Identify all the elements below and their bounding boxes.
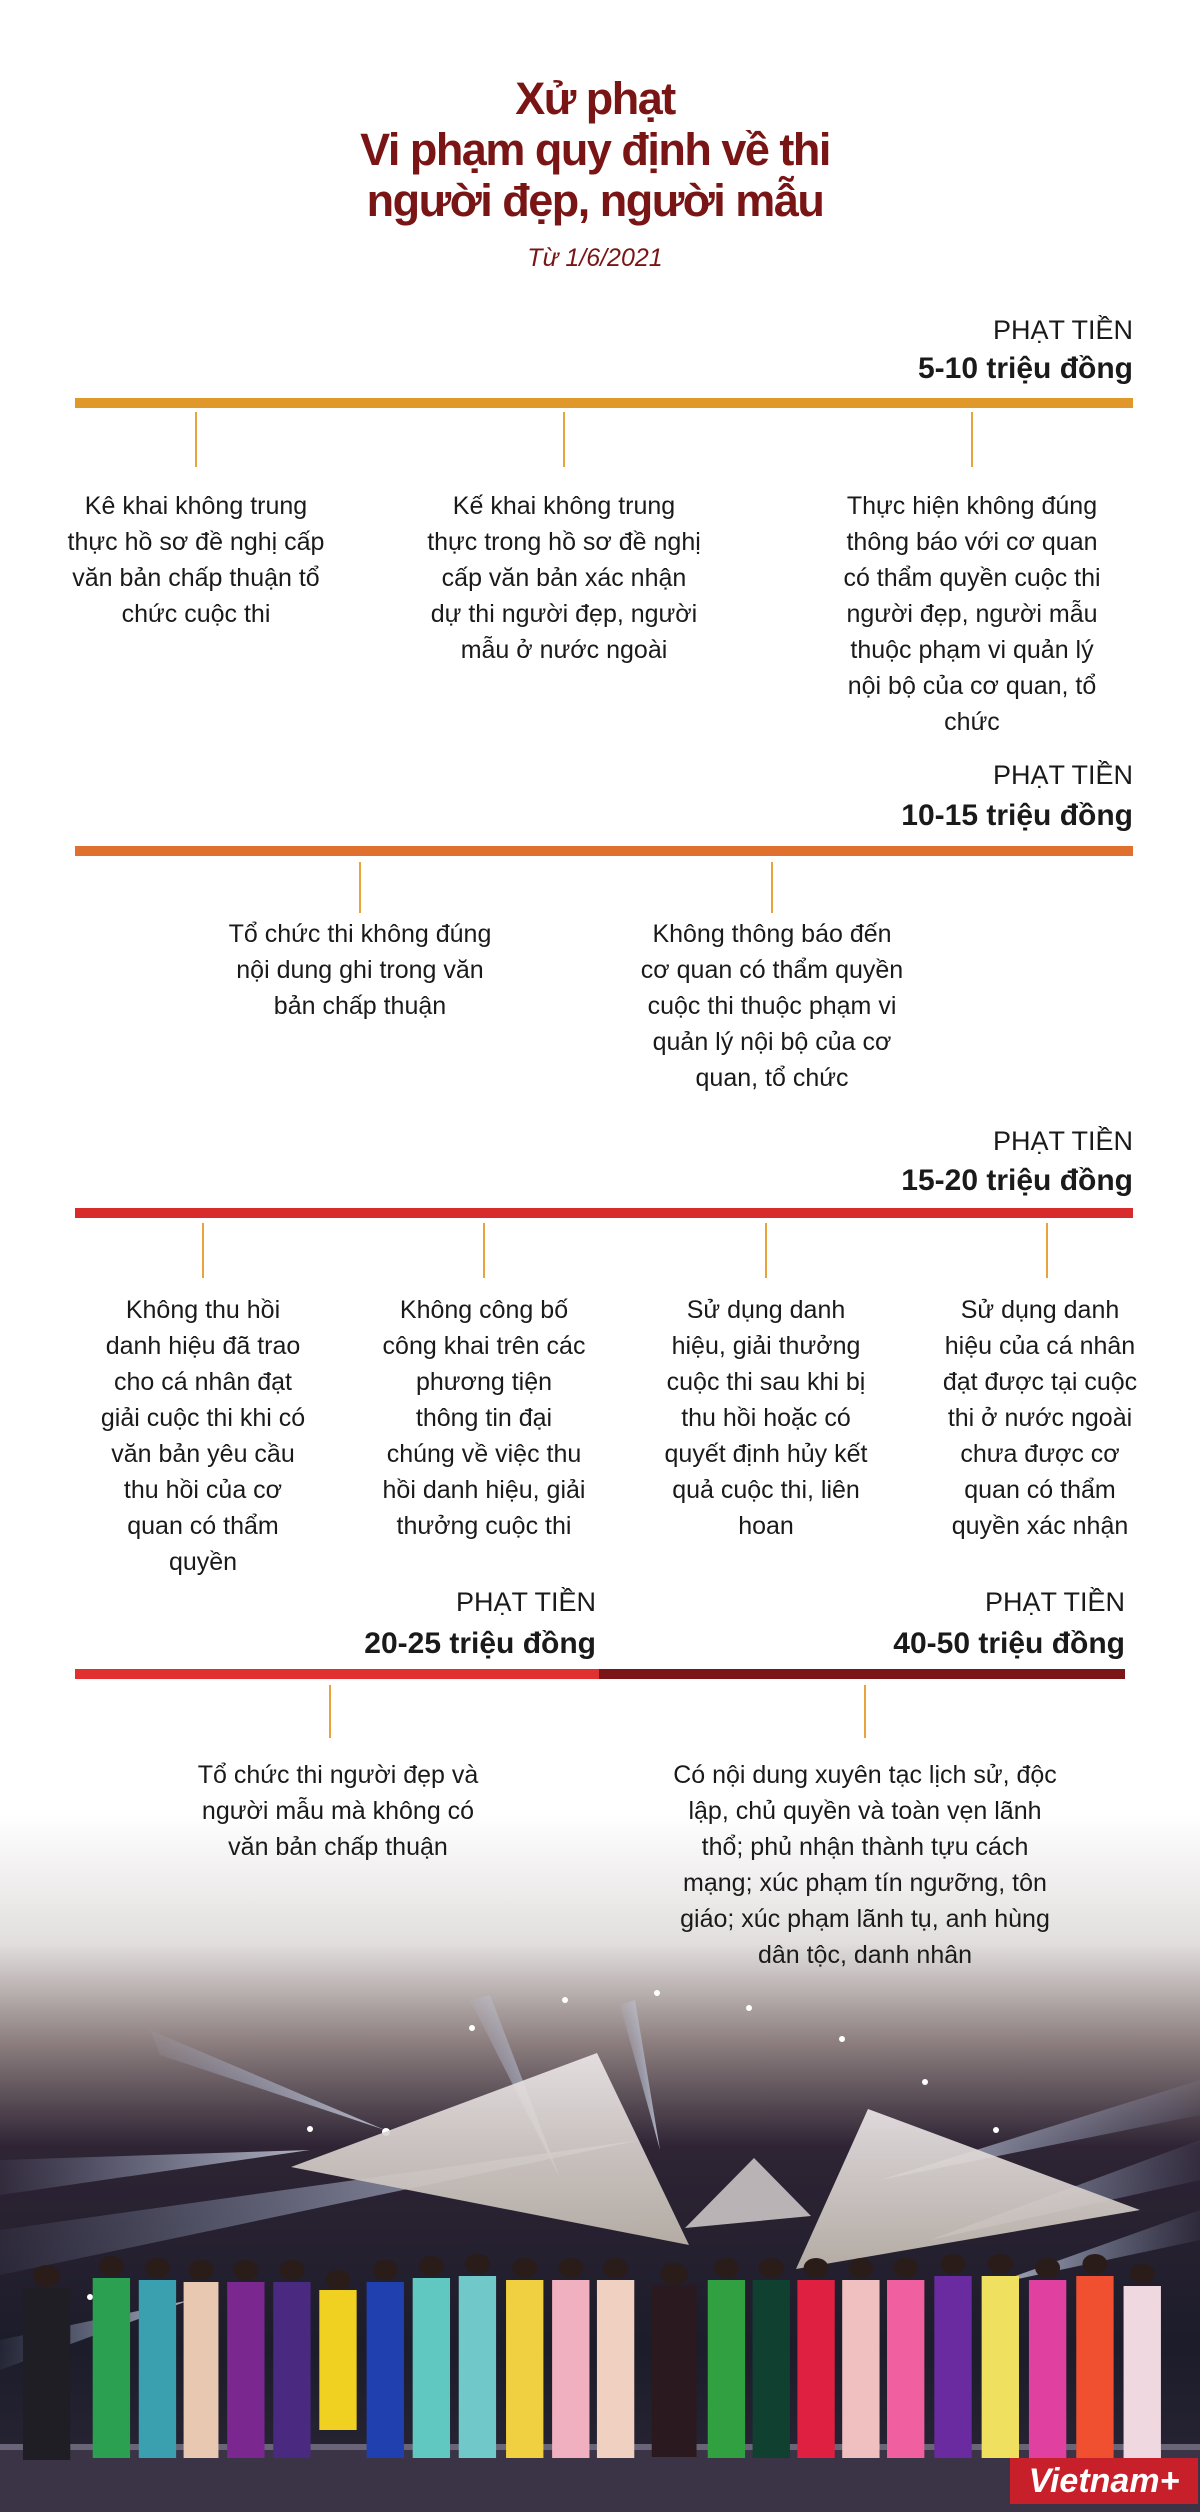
item text: giáo; xúc phạm lãnh tụ, anh hùng <box>680 1905 1050 1933</box>
subtitle: date: Từ 1/6/2021 <box>527 244 663 272</box>
item text: quan, tổ chức <box>696 1064 848 1092</box>
item text: nội bộ của cơ quan, tổ <box>848 672 1096 700</box>
tick <box>329 1685 331 1738</box>
item text: Thực hiện không đúng <box>847 492 1097 520</box>
item text: danh hiệu đã trao <box>106 1332 300 1360</box>
item text: văn bản yêu cầu <box>111 1440 295 1468</box>
heading left: PHẠT TIỀN <box>456 1587 596 1617</box>
item text: người mẫu mà không có <box>202 1797 474 1825</box>
section 3: 15-20 triệu đồng <box>75 1126 1137 1576</box>
heading right: PHẠT TIỀN <box>985 1587 1125 1617</box>
timeline bar <box>75 1208 1133 1218</box>
item text: chúng về việc thu <box>387 1440 581 1468</box>
item text: hồi danh hiệu, giải <box>383 1476 585 1504</box>
item text: đạt được tại cuộc <box>943 1368 1137 1396</box>
item text: Tổ chức thi không đúng <box>229 920 491 948</box>
item text: Tổ chức thi người đẹp và <box>198 1761 478 1789</box>
tick <box>1046 1223 1048 1278</box>
item text: cơ quan có thẩm quyền <box>641 956 903 984</box>
amount: 15-20 triệu đồng <box>901 1164 1133 1197</box>
background photo: stage <box>0 1846 1200 2512</box>
item text: thuộc phạm vi quản lý <box>850 636 1094 664</box>
item text <box>641 920 903 1092</box>
item text: chức <box>944 708 1000 736</box>
item text <box>665 1296 868 1540</box>
heading: PHẠT TIỀN <box>993 315 1133 345</box>
title: Xử phạt <box>515 73 675 124</box>
item text: Sử dụng danh <box>687 1296 845 1324</box>
item text: lập, chủ quyền và toàn vẹn lãnh <box>688 1797 1042 1825</box>
item text: văn bản chấp thuận <box>228 1833 448 1861</box>
item text: Có nội dung xuyên tạc lịch sử, độc <box>673 1761 1057 1789</box>
item text: giải cuộc thi khi có <box>101 1404 305 1432</box>
item text: mạng; xúc phạm tín ngưỡng, tôn <box>683 1869 1047 1897</box>
item text <box>383 1296 585 1540</box>
item text: quyền <box>169 1548 237 1576</box>
item text: người đẹp, người mẫu <box>846 600 1098 628</box>
item text: thông báo với cơ quan <box>846 528 1098 556</box>
item text: thông tin đại <box>416 1404 552 1432</box>
item text: thi ở nước ngoài <box>948 1404 1132 1432</box>
amount left: 20-25 triệu đồng <box>364 1627 596 1660</box>
tick <box>864 1685 866 1738</box>
item text: cuộc thi sau khi bị <box>667 1368 865 1396</box>
item text: công khai trên các <box>383 1332 585 1360</box>
item text: thu hồi hoặc có <box>681 1404 851 1432</box>
tick <box>765 1223 767 1278</box>
item text <box>843 492 1101 736</box>
item text: hiệu của cá nhân <box>945 1332 1135 1360</box>
amount right: 40-50 triệu đồng <box>893 1627 1125 1660</box>
section 2: 10-15 triệu đồng <box>75 760 1133 1092</box>
item text <box>68 492 324 628</box>
item text: quyền xác nhận <box>952 1512 1128 1540</box>
item text: có thẩm quyền cuộc thi <box>843 564 1101 592</box>
item text: thu hồi của cơ <box>124 1476 282 1504</box>
item text: quan có thẩm <box>964 1476 1116 1504</box>
item text: văn bản chấp thuận tổ <box>72 564 320 592</box>
item text: thổ; phủ nhận thành tựu cách <box>702 1833 1028 1861</box>
item text: quả cuộc thi, liên <box>672 1476 860 1504</box>
timeline bar <box>75 398 1133 408</box>
item text <box>943 1296 1137 1540</box>
item text: thưởng cuộc thi <box>397 1512 571 1540</box>
amount: 10-15 triệu đồng <box>901 799 1133 832</box>
logo: Vietnam+ <box>1010 2458 1198 2504</box>
heading: PHẠT TIỀN <box>993 760 1133 790</box>
item text: Không thông báo đến <box>652 920 892 948</box>
timeline bar right <box>599 1669 1125 1679</box>
item text: Kế khai không trung <box>453 492 675 520</box>
tick <box>483 1223 485 1278</box>
tick <box>971 412 973 467</box>
item text <box>198 1761 478 1861</box>
logo: Vietnam+: Vietnam+ <box>1029 2462 1179 2500</box>
tick <box>563 412 565 467</box>
item text: Kê khai không trung <box>85 492 307 520</box>
item text <box>101 1296 305 1576</box>
item text: mẫu ở nước ngoài <box>461 636 667 664</box>
timeline bar <box>75 846 1133 856</box>
item text: phương tiện <box>416 1368 552 1396</box>
tick <box>202 1223 204 1278</box>
item text <box>673 1761 1057 1969</box>
item text: cấp văn bản xác nhận <box>442 564 686 592</box>
title: Vi phạm quy định về thi <box>360 124 830 175</box>
item text: quyết định hủy kết <box>665 1440 867 1468</box>
tick <box>771 862 773 913</box>
item text: Sử dụng danh <box>961 1296 1119 1324</box>
item text: cho cá nhân đạt <box>114 1368 292 1396</box>
item text: hiệu, giải thưởng <box>672 1332 860 1360</box>
item text: bản chấp thuận <box>274 992 446 1020</box>
item text: cuộc thi thuộc phạm vi <box>648 992 896 1020</box>
tick <box>195 412 197 467</box>
contestants <box>23 2254 1161 2460</box>
item text: thực hồ sơ đề nghị cấp <box>68 528 324 556</box>
item text: thực trong hồ sơ đề nghị <box>427 528 701 556</box>
tick <box>359 862 361 913</box>
section 4: 20-25 and 40-50 triệu đồng <box>75 1587 1125 1969</box>
item text: Không công bố <box>400 1296 568 1324</box>
item text <box>427 492 701 664</box>
title <box>360 73 830 226</box>
item text: quan có thẩm <box>127 1512 279 1540</box>
item text <box>229 920 491 1020</box>
timeline bar left <box>75 1669 599 1679</box>
heading: PHẠT TIỀN <box>993 1126 1133 1156</box>
title: người đẹp, người mẫu <box>367 175 823 226</box>
item text: dân tộc, danh nhân <box>758 1941 972 1969</box>
item text: hoan <box>738 1512 794 1540</box>
item text: quản lý nội bộ của cơ <box>653 1028 891 1056</box>
amount: 5-10 triệu đồng <box>918 352 1133 385</box>
section 1: 5-10 triệu đồng <box>68 315 1133 736</box>
item text: Không thu hồi <box>126 1296 280 1324</box>
stage triangles <box>291 2053 689 2245</box>
item text: dự thi người đẹp, người <box>431 600 697 628</box>
item text: chức cuộc thi <box>122 600 270 628</box>
item text: nội dung ghi trong văn <box>236 956 484 984</box>
item text: chưa được cơ <box>960 1440 1120 1468</box>
